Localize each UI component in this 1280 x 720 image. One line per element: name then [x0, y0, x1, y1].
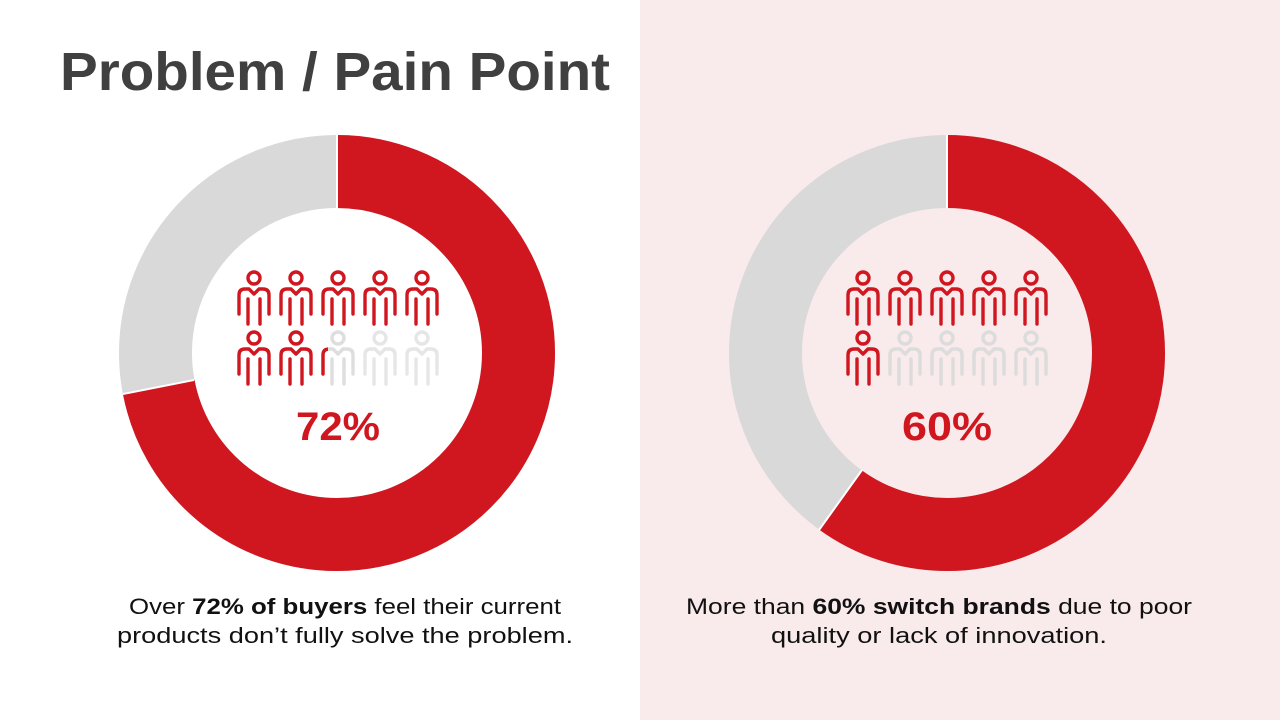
text: products don’t fully solve the problem. [117, 623, 573, 648]
stat: 60%: 60% [902, 405, 992, 449]
caption: right: More than 60% switch brands due to poor [686, 594, 1192, 619]
icon grid: people 72% [239, 272, 437, 384]
icon grid: people 60% [848, 272, 1046, 384]
caption: left: Over 72% of buyers feel their current [129, 594, 561, 619]
text: quality or lack of innovation. [771, 623, 1107, 648]
donut chart: 60% [766, 135, 1128, 534]
right panel background [640, 0, 1280, 720]
donut chart: 72% [123, 135, 518, 534]
stat: 72%: 72% [296, 405, 380, 449]
title: Problem / Pain Point [60, 42, 610, 102]
